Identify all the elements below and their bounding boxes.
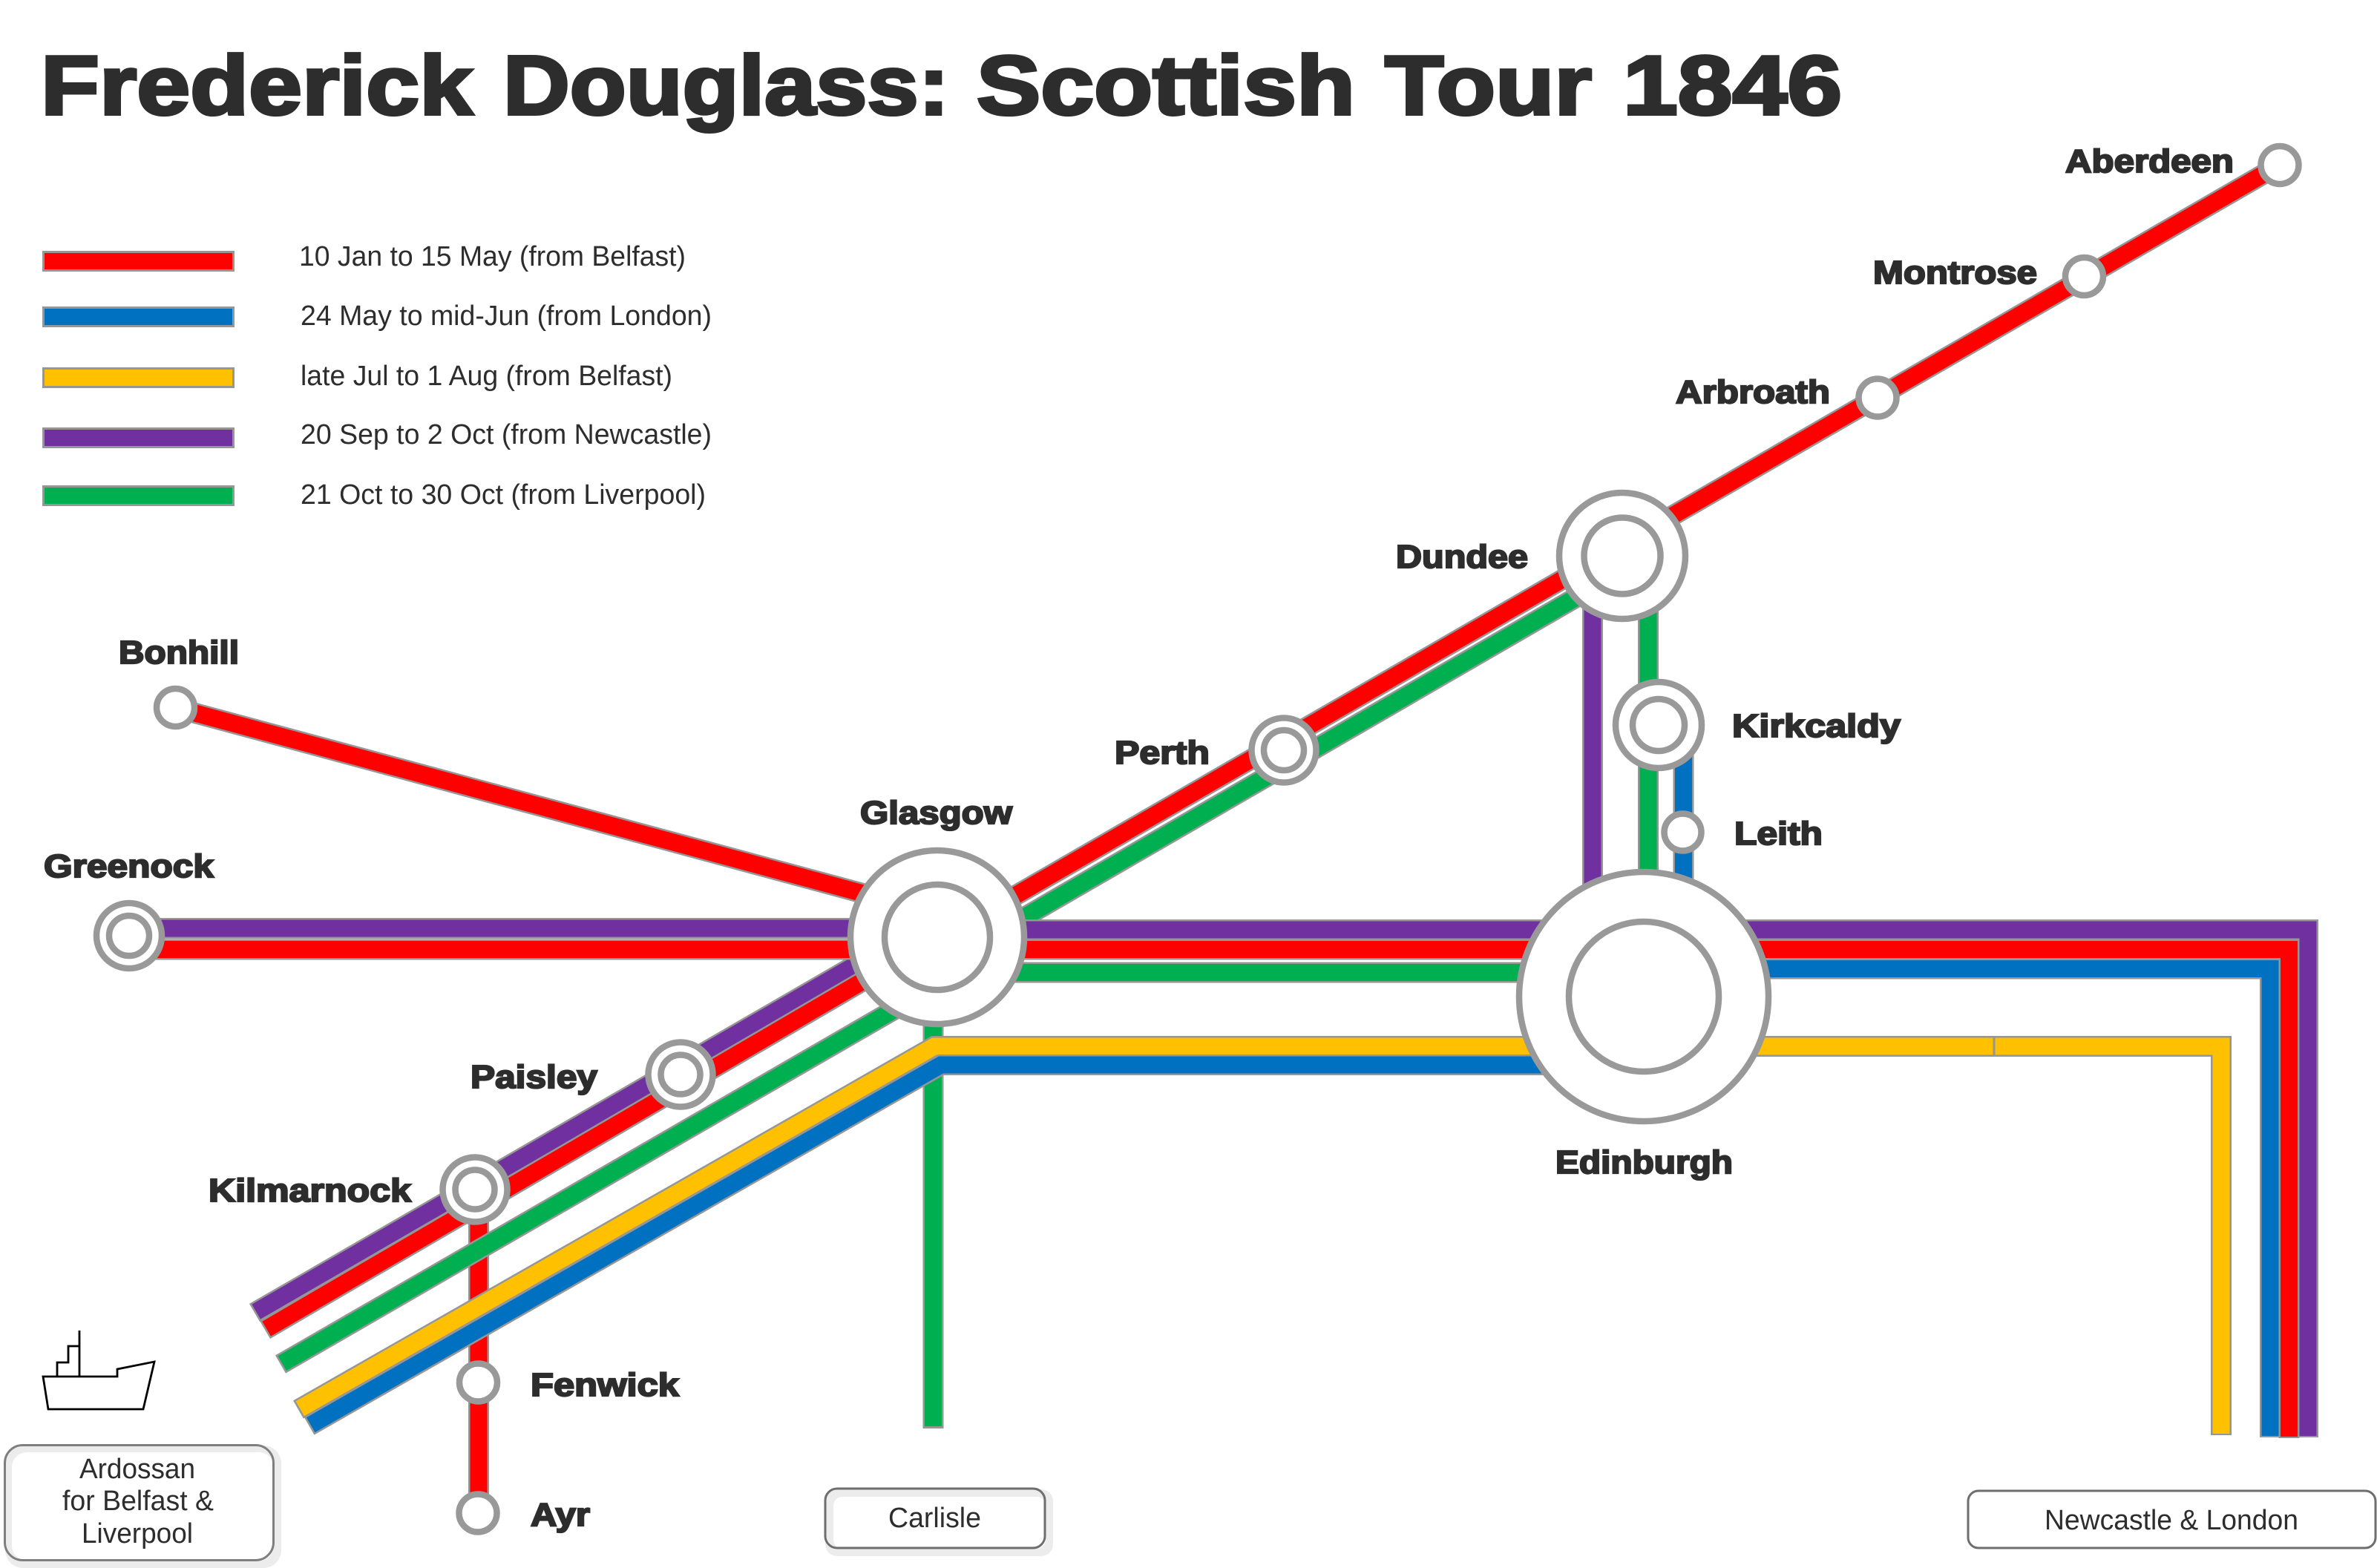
title [41,39,1842,132]
title: Scottish [977,39,1355,132]
station: Arbroath [1676,374,1897,417]
route: red Ardossan to Glasgow [265,974,876,1330]
route: blue Ardossan to Edinburgh [309,1065,1644,1426]
station: Leith [1664,813,1823,852]
station: Arbroath: Arbroath [1676,374,1830,410]
station: Greenock: Greenock [44,848,214,885]
legend item: red line [43,241,686,272]
station: Kilmarnock [209,1158,508,1221]
box: Ardossan: Ardossan [79,1454,195,1485]
box: Ardossan: for Belfast & [62,1486,214,1517]
station: Fenwick: Fenwick [531,1367,680,1403]
route: green Dundee to Edinburgh [1638,556,1659,997]
station: Fenwick [459,1364,680,1403]
station: Glasgow [850,795,1024,1024]
title: 1846 [1623,39,1842,132]
legend item: yellow line [43,361,672,392]
route: blue Edinburgh to London [1644,969,2270,1437]
route: red Greenock to Newcastle [129,950,2289,1438]
route: red branch Kilmarnock to Ayr [468,1190,489,1513]
station: Kirkcaldy: Kirkcaldy [1732,708,1901,744]
station: Greenock [44,848,214,968]
station: Bonhill: Bonhill [119,634,239,671]
station: Montrose [1873,255,2103,295]
legend item: purple line: 20 Sep to 2 Oct (from Newcastle) [301,419,712,450]
station: Paisley: Paisley [471,1059,598,1095]
station: Kilmarnock: Kilmarnock [209,1172,412,1209]
box: Ardossan: Liverpool [82,1518,193,1549]
station: Aberdeen: Aberdeen [2065,143,2234,180]
title: Frederick [41,39,473,132]
station: Perth [1115,718,1317,782]
route: green Dundee to Glasgow [937,571,1622,968]
route: green Ardossan to Glasgow [281,985,937,1364]
legend item: yellow line: late Jul to 1 Aug (from Belfast) [301,361,672,392]
station: Aberdeen [2065,143,2299,184]
legend item: blue line [43,301,712,332]
box: Carlisle: Carlisle [888,1503,981,1534]
station: Ayr [459,1495,590,1533]
station: Montrose: Montrose [1873,255,2037,291]
station: Dundee [1396,493,1685,619]
title: Tour [1385,39,1592,132]
legend item: green line [43,479,706,511]
box: Carlisle [825,1489,1053,1556]
legend item: purple line [43,419,712,450]
route: red Bonhill to Glasgow [176,708,937,913]
box: Newcastle and London [1968,1491,2376,1548]
route: green Glasgow to Edinburgh [937,962,1644,983]
station: Ayr: Ayr [531,1497,590,1533]
station: Paisley [471,1042,712,1107]
route: red Aberdeen to Glasgow [957,165,2280,929]
station: Perth: Perth [1115,735,1210,771]
legend item: green line: 21 Oct to 30 Oct (from Liverpool) [301,479,706,511]
legend [43,241,712,511]
station: Bonhill [119,634,239,726]
legend item: blue line: 24 May to mid-Jun (from London) [301,301,712,332]
route: green branch Glasgow to Carlisle [923,965,944,1428]
box: Newcastle and London: Newcastle & London [2045,1505,2298,1536]
title: Douglass: [503,39,949,132]
route: yellow Ardossan to Newcastle [298,1036,2221,1435]
route: purple Greenock to Newcastle [129,928,2308,1437]
box: Ardossan [4,1446,281,1568]
route: purple Dundee to Edinburgh [1582,556,1603,997]
station: Glasgow: Glasgow [860,795,1013,831]
legend item: red line: 10 Jan to 15 May (from Belfast) [299,241,686,272]
station: Dundee: Dundee [1396,539,1528,575]
station: Edinburgh: Edinburgh [1555,1144,1733,1181]
station: Edinburgh [1519,872,1768,1181]
station: Kirkcaldy [1616,682,1901,768]
station: Leith: Leith [1734,816,1823,852]
icon: ship [43,1331,154,1409]
route: blue Kirkcaldy to Edinburgh [1673,725,1694,997]
route: purple Ardossan to Glasgow [255,945,891,1313]
